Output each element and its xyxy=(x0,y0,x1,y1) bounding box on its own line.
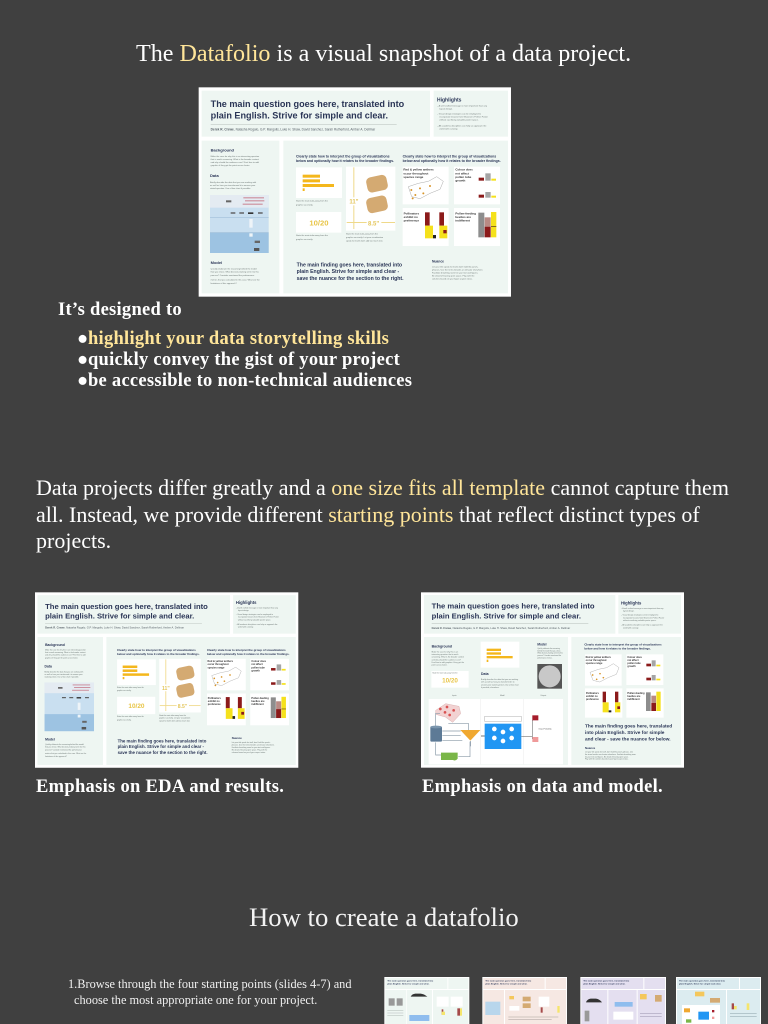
poster: main datafolio example: that is worth answering. What is the broader context xyxy=(211,158,259,161)
thumbnail: purple template: The main question goes here, translated into xyxy=(583,979,630,982)
poster: EDA and results template: Make the case for why this is an interesting question xyxy=(45,649,86,652)
poster: EDA and results template: metrics that you calculated in this case. What are the xyxy=(45,752,86,755)
poster: EDA and results template: Derek R. Crewe, Natasha Rogalo, G.P. Margolis, Luke H. Shaw, David Sanchez, Sarah Rutherford, Amber A. Dellmar xyxy=(45,626,184,630)
poster: data and model template: Colour does xyxy=(627,656,643,659)
poster: EDA and results template: – A well crafted message is more important than any xyxy=(236,607,278,610)
poster: EDA and results template: graphic succinctly. xyxy=(117,718,132,721)
poster: main datafolio example: Briefly describe the data that you are working with xyxy=(210,181,257,184)
poster: data and model template: exhibit no xyxy=(586,695,598,698)
poster: EDA and results template: plain English. Strive for simple and clear. xyxy=(45,612,194,621)
poster: EDA and results template: The main question goes here, translated into xyxy=(45,602,208,611)
poster: EDA and results template: Background xyxy=(45,643,65,647)
poster: EDA and results template: speak for itself; don't add too much text. xyxy=(159,719,191,722)
poster: data and model template: world with curiosity. xyxy=(623,626,639,629)
poster: main datafolio example: world with curiosity. xyxy=(439,127,458,130)
poster: data and model template: not affect xyxy=(627,659,639,662)
poster: main datafolio example: limitations of this approach? xyxy=(211,282,237,285)
poster: data and model template: Model xyxy=(500,695,505,697)
thumbnail: pink template xyxy=(482,977,567,1024)
poster: data and model template: Nuance xyxy=(585,746,596,750)
poster: main datafolio example: – All academic disciplines can help us approach the xyxy=(437,124,487,127)
paragraph: starting points: Data projects differ greatly and a one size fits all template cannot capture them xyxy=(36,475,729,500)
poster: EDA and results template: that is worth answering. What is the broader context xyxy=(45,651,86,654)
poster: data and model template: answer your stated question. Use a flow chart xyxy=(481,683,519,686)
poster: main datafolio example: Background xyxy=(211,148,235,153)
poster: EDA and results template: – All academic disciplines can help us approach the xyxy=(236,623,277,626)
poster: main datafolio example: Data xyxy=(210,173,219,178)
subheading: designed to: It’s designed to xyxy=(58,300,182,320)
poster: main datafolio example: – A well crafted message is more important than any xyxy=(437,105,488,108)
poster: main datafolio example: Clearly state how to interpret the group of visualizations xyxy=(403,154,496,158)
poster: data and model template: Outputs xyxy=(540,694,546,697)
poster: EDA and results template: limitations of this approach? xyxy=(45,755,67,758)
thumbnail: purple template xyxy=(580,977,666,1024)
poster: data and model template: species range xyxy=(586,662,603,665)
poster: EDA and results template: 11" xyxy=(162,686,170,692)
poster: data and model template: Inputs xyxy=(452,694,457,697)
poster: EDA and results template: Data xyxy=(45,664,52,668)
poster: EDA and results template: exhibit no xyxy=(208,700,220,703)
poster: data and model template: The main finding goes here, translated xyxy=(585,724,672,730)
poster: data and model template: pollen tube xyxy=(627,662,641,665)
poster: EDA and results template: Clearly state how to interpret the group of visualizations xyxy=(117,648,196,652)
poster: data and model template: beetles are xyxy=(627,695,641,698)
poster: EDA and results template: Colour does xyxy=(251,660,267,663)
poster: EDA and results template: that you chose. What decision-making went into this xyxy=(45,746,86,749)
poster: data and model template: and clear - save the nuance for below. xyxy=(585,736,671,742)
poster: EDA and results template: Briefly describe the data that you are working with xyxy=(45,671,83,673)
paragraph: starting points: projects. xyxy=(36,528,111,553)
poster: EDA and results template: phrases. Use the terms besides an elevator elsewhere. xyxy=(232,744,275,747)
poster: main datafolio example: 11" xyxy=(349,200,359,206)
poster: main datafolio example: graphic succinctly. xyxy=(296,238,313,241)
poster: EDA and results template: Facilitate breathing room for your text and figures. xyxy=(232,746,271,749)
poster: main datafolio example: phrases. Use the terms besides an elevator elsewhere. xyxy=(432,268,484,271)
poster: data and model template: Make the case for why this is an xyxy=(432,650,458,653)
bullet list: highlight your data storytelling skills xyxy=(88,329,389,349)
heading: how to create: How to create a datafolio xyxy=(249,902,519,932)
thumbnail: mint template: The main question goes here, translated into xyxy=(387,979,434,982)
poster: EDA and results template: State the main take-away from the xyxy=(117,686,144,689)
poster: main datafolio example: and why should the audience care? Feel free to add xyxy=(211,161,260,164)
poster: EDA and results template: – Visual design strategies can be employed to xyxy=(236,613,273,616)
paragraph: starting points: all. Instead, we provide different starting points that reflect distinct types of xyxy=(36,502,700,526)
poster: main datafolio example: pollen tube xyxy=(455,175,472,179)
thumbnail: pink template: The main question goes here, translated into xyxy=(485,979,532,982)
poster: data and model template: for your text and figures. Be afraid of leaving open space. xyxy=(585,755,629,758)
poster: data and model template: incorporate lessons from Shannon's Perfect Poster xyxy=(623,616,665,619)
step 1 text: 1.Browse through the four starting points (slides 4-7) and xyxy=(68,977,352,991)
poster: data and model template: if possible, elsewhere. xyxy=(481,687,500,689)
bullet list: ● xyxy=(77,329,88,349)
poster: main datafolio example: State the main take-away from the xyxy=(296,199,329,202)
poster: EDA and results template: not affect xyxy=(251,663,263,666)
poster: data and model template: behind the model that you chose. xyxy=(537,649,561,652)
poster: data and model template: occur throughout xyxy=(586,659,607,662)
poster: main datafolio example: Highlights xyxy=(437,97,462,103)
poster: data and model template: Let your title speak for itself, don't hold the punch-phrases. Use xyxy=(585,751,633,754)
poster: EDA and results template: The main finding goes here, translated into xyxy=(118,738,207,743)
poster: main datafolio example: State the main take-away from the xyxy=(296,234,329,237)
bullet list: ● xyxy=(77,371,88,391)
poster: EDA and results template: incorporate lessons from Shannon's Perfect Poster xyxy=(238,616,279,619)
poster: data and model template: Model xyxy=(537,642,547,646)
poster: data and model template: into plain English. Strive for simple xyxy=(585,730,665,736)
poster: data and model template: Output Probability xyxy=(538,727,552,730)
poster: main datafolio example: that you chose. What decision-making went into this xyxy=(211,271,259,274)
poster: main datafolio example: save the nuance for the section to the right. xyxy=(297,276,404,282)
poster: data and model template: performance metrics. xyxy=(537,656,553,659)
poster: data and model template: without sacrificing valuable poster space. xyxy=(623,619,657,622)
poster: EDA and results template: Pollen-feeding xyxy=(251,697,269,700)
poster: EDA and results template: Clearly state how to interpret the group of visualizations xyxy=(207,648,286,652)
poster: EDA and results template: stated question. Use a flow chart if possible. xyxy=(45,676,79,679)
thumbnail: blue template xyxy=(676,977,761,1024)
poster: main datafolio example: Nuance xyxy=(432,259,444,263)
poster: main datafolio example: Colour does xyxy=(455,168,473,172)
poster: data and model template: interesting question that is worth xyxy=(432,653,458,656)
poster: main datafolio example: as well as how you transformed it to answer your xyxy=(210,184,256,187)
bullet list: be accessible to non-technical audiences xyxy=(88,371,412,391)
poster: main datafolio example: Model xyxy=(211,260,222,265)
thumbnail: mint template xyxy=(384,977,469,1024)
poster: EDA and results template: below and optionally how it relates to the broader findings. xyxy=(207,652,290,656)
starting point thumbnails xyxy=(384,977,761,1024)
poster: main datafolio example: process? Consider mentioned the performance xyxy=(211,274,255,277)
poster: data and model template: Red & yellow anthers xyxy=(586,656,612,659)
title: The Datafolio is a visual snapshot of a data project. xyxy=(136,41,631,67)
poster: EDA and results template: State the main take-away from the xyxy=(117,715,144,718)
poster: data and model template: Pollinators xyxy=(586,692,600,695)
poster: EDA and results template: pollen tube xyxy=(251,666,265,669)
poster: data and model template: Derek R. Crewe, Natasha Rogalo, G.P. Margolis, Luke H. Shaw, David Sanchez, Sarah Rutherford, Amber A. Dellmar xyxy=(432,626,570,630)
poster: main datafolio example: The main question goes here, translated into xyxy=(211,99,405,109)
poster: main datafolio example: below and optionally how it relates to the broader findings. xyxy=(296,159,394,163)
poster: data and model template: Pollen-feeding xyxy=(627,692,645,695)
poster: EDA and results template: process? Consider mentioned the performance xyxy=(45,748,82,751)
poster: main datafolio example: stated question. Use a flow chart if possible. xyxy=(210,187,251,190)
poster: main datafolio example: State the main take-away from the xyxy=(346,233,379,236)
poster: data and model template: Highlights xyxy=(621,600,642,605)
poster: data and model template: – Visual design strategies can be employed to xyxy=(621,614,658,617)
paragraph: starting points xyxy=(36,475,729,553)
poster: data and model template: indifferent xyxy=(627,698,640,701)
poster: main datafolio example: Facilitate breathing room for your text and figures. xyxy=(432,271,479,274)
thumbnail: purple template: plain English. Strive for simple and clear. xyxy=(583,982,626,985)
poster: EDA and results template: graphic succinctly. xyxy=(117,689,132,692)
poster: EDA and results template: beetles are xyxy=(251,700,265,703)
poster: main datafolio example: growth xyxy=(455,179,465,183)
poster: main datafolio example: indifferent xyxy=(455,219,470,223)
poster: main datafolio example: beetles are xyxy=(455,215,471,219)
poster: EDA and results template: preference xyxy=(208,703,221,706)
poster: data and model template: Feel free to add graphics if they get the xyxy=(432,661,464,664)
thumbnail: blue template: plain English. Strive for simple and clear. xyxy=(679,982,721,985)
caption: EDA and results: Emphasis on EDA and results. xyxy=(36,777,284,797)
poster: EDA and results template: State the main take-away from the xyxy=(159,714,186,717)
poster: main datafolio example: species range xyxy=(403,175,424,179)
poster: data and model template: preference xyxy=(586,698,599,701)
poster: EDA and results template: columns based on your figure aspect ratios. xyxy=(232,751,266,754)
poster: main datafolio example: metrics that you calculated in this case. What are the xyxy=(211,278,260,281)
poster: EDA and results template: Let your title speak for itself, don't hold the punch- xyxy=(232,741,271,744)
poster: data and model template: plain English. Strive for simple and clear. xyxy=(432,612,581,621)
poster: data and model template: The main question goes here, translated into xyxy=(432,602,595,611)
poster: main datafolio example: plain English. Strive for simple and clear - xyxy=(297,269,400,275)
poster: EDA and results template: layout design. xyxy=(238,609,250,612)
step 1 text xyxy=(68,977,352,1007)
poster: data and model template: Briefly describe the data that you are working xyxy=(481,678,518,681)
poster: main datafolio example: Let your title speak for itself, don't hold the punch- xyxy=(432,265,478,268)
poster: EDA and results template: plain English. Strive for simple and clear - xyxy=(118,744,205,749)
thumbnail: blue template: The main question goes here, translated into xyxy=(679,979,726,982)
poster: EDA and results template: occur throughout xyxy=(208,663,229,666)
poster: data and model template: 10/20 xyxy=(442,678,458,685)
poster: EDA and results template: Pollinators xyxy=(208,697,221,700)
poster: main datafolio example: Pollen-feeding xyxy=(455,211,476,215)
poster: main datafolio example: Pollinators xyxy=(404,211,420,215)
poster: data and model template: the terms besides an elevator elsewhere. Facilitate breathing room xyxy=(585,753,636,756)
poster: EDA and results template: Quickly elaborate the reasoning behind the model xyxy=(45,743,84,746)
poster: data and model template: – A well crafted message is more important than any xyxy=(621,607,663,610)
poster: main datafolio example: not affect xyxy=(455,171,469,175)
poster: data and model template: and why should the audience care? xyxy=(432,658,461,661)
poster: main datafolio example: without sacrificing valuable poster space. xyxy=(439,119,479,122)
poster: EDA and results template: indifferent xyxy=(251,703,264,706)
poster: EDA and results template: 8.5" xyxy=(178,704,188,710)
poster: data and model template: Clearly state how to interpret the group of visualizations xyxy=(584,643,662,647)
poster: data and model template: point across faster. xyxy=(432,664,448,667)
bullet list xyxy=(77,329,412,391)
poster: data and model template: process? Consider mentioned the xyxy=(537,654,561,657)
poster: data and model template: layout design. xyxy=(623,610,635,613)
poster: data and model template: Data xyxy=(481,672,489,676)
poster: EDA and results template: graphic succinctly. Let your visualization xyxy=(159,717,190,720)
poster: main datafolio example: Derek R. Crewe, Natasha Rogalo, G.P. Margolis, Luke H. Shaw, David Sanchez, Sarah Rutherford, Amber A. Dellmar xyxy=(211,128,375,132)
poster: EDA and results template: growth xyxy=(251,669,260,672)
poster: EDA and results template: below and optionally how it relates to the broader findings. xyxy=(117,652,200,656)
poster: data and model template: – All academic disciplines can help us approach the xyxy=(621,624,663,627)
poster: data and model template: Play with the columns based on your figure aspect ratios. xyxy=(585,758,629,761)
poster: main datafolio example xyxy=(198,87,511,297)
poster: data and model template xyxy=(421,592,684,768)
poster: EDA and results template: graphics if they get the point across faster. xyxy=(45,656,79,659)
poster: main datafolio example: columns based on your figure aspect ratios. xyxy=(432,277,473,280)
poster: main datafolio example: 10/20 xyxy=(309,218,329,227)
poster: EDA and results template: Nuance xyxy=(232,736,242,740)
poster: main datafolio example: The main finding goes here, translated into xyxy=(297,262,402,268)
poster: data and model template: State the main take-away from the xyxy=(432,672,458,675)
poster: EDA and results template: and why should the audience care? Feel free to add xyxy=(45,654,86,657)
thumbnail: pink template: plain English. Strive for simple and clear. xyxy=(485,982,528,985)
poster: main datafolio example: layout design. xyxy=(439,108,453,111)
poster: data and model template: below and how it relates to the broader findings. xyxy=(584,647,651,651)
poster: EDA and results template: Highlights xyxy=(236,600,257,605)
poster: data and model template: Background xyxy=(432,645,452,649)
poster: EDA and results template: Model xyxy=(45,737,55,741)
poster: EDA and results template: world with curiosity. xyxy=(238,626,254,629)
poster: main datafolio example: Be afraid of leaving open space. Play with the xyxy=(432,274,475,277)
poster: EDA and results template: Be afraid of leaving open space. Play with the xyxy=(232,749,267,752)
poster: main datafolio example: graphic succinctly. Let your visualization xyxy=(346,236,384,239)
poster: data and model template: Quickly elaborate the reasoning xyxy=(537,647,560,650)
poster: data and model template: with as well as how you transformed it to xyxy=(481,681,514,684)
step 1 text: choose the most appropriate one for your project. xyxy=(74,993,317,1007)
bullet list: ● xyxy=(77,350,88,370)
poster: data and model template: growth xyxy=(627,665,636,668)
poster: main datafolio example: exhibit no xyxy=(404,215,418,219)
poster: main datafolio example: graphics if they get the point across faster. xyxy=(211,164,250,167)
poster: EDA and results template xyxy=(35,592,298,768)
poster: EDA and results template: 10/20 xyxy=(128,703,145,710)
poster: main datafolio example: graphic succinctly. xyxy=(296,203,313,206)
poster: EDA and results template: as well as how you transformed it to answer your xyxy=(45,673,83,676)
poster: main datafolio example: speak for itself; don't add too much text. xyxy=(346,239,383,242)
poster: main datafolio example: Red & yellow anthers xyxy=(403,168,434,172)
poster: EDA and results template: save the nuance for the section to the right. xyxy=(118,750,208,755)
poster: EDA and results template: without sacrificing valuable poster space. xyxy=(238,618,271,621)
poster: main datafolio example: plain English. Strive for simple and clear. xyxy=(211,111,388,121)
poster: EDA and results template: Red & yellow anthers xyxy=(208,660,234,663)
poster: main datafolio example: Make the case for why this is an interesting question xyxy=(211,155,260,158)
poster: data and model template: answering. What is the broader context xyxy=(432,656,464,659)
poster: main datafolio example: incorporate lessons from Shannon's Perfect Poster xyxy=(439,116,488,119)
poster: EDA and results template: species range xyxy=(208,666,225,669)
poster: main datafolio example: occur throughout xyxy=(403,171,428,175)
poster: main datafolio example: 8.5" xyxy=(368,221,379,227)
caption: data and model: Emphasis on data and model. xyxy=(422,777,663,797)
poster: data and model template: What decision-making went into this xyxy=(537,652,563,655)
poster: main datafolio example: preference xyxy=(404,219,419,223)
poster: main datafolio example: Clearly state how to interpret the group of visualizations xyxy=(296,154,390,158)
bullet list: quickly convey the gist of your project xyxy=(88,350,400,370)
poster: main datafolio example: Quickly elaborate the reasoning behind the model xyxy=(211,267,257,270)
poster: main datafolio example: – Visual design strategies can be employed to xyxy=(437,113,482,116)
thumbnail: mint template: plain English. Strive for simple and clear. xyxy=(387,982,430,985)
poster: main datafolio example: below and optionally how it relates to the broader findings. xyxy=(403,159,501,163)
